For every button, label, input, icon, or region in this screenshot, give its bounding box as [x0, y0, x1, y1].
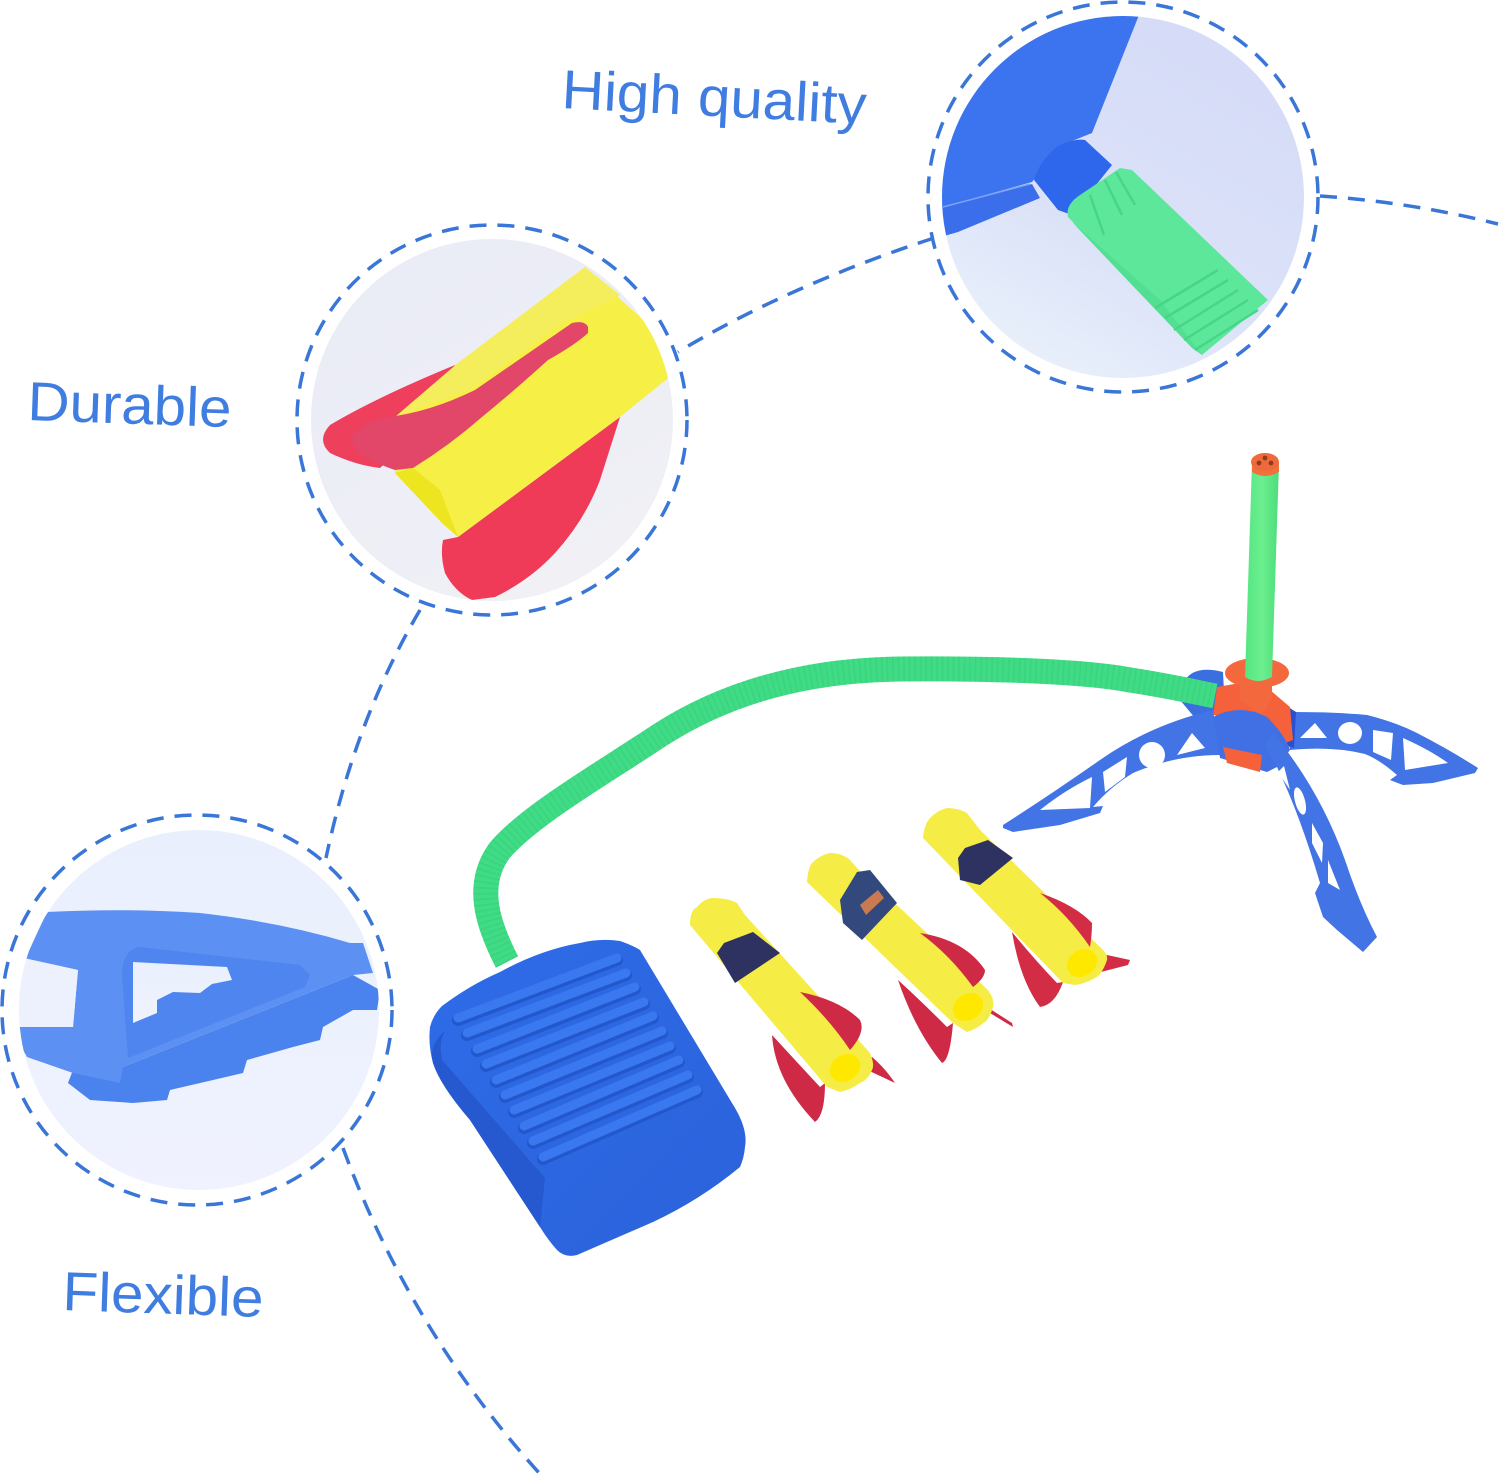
- launcher right leg: [1283, 708, 1478, 785]
- launch tube: [1245, 463, 1279, 681]
- label: Flexible: Flexible: [62, 1260, 265, 1329]
- label: Durable: Durable: [27, 370, 233, 439]
- tube cap: [1251, 453, 1279, 476]
- product: launch stand: [1003, 453, 1478, 952]
- label: High quality: High quality: [560, 58, 869, 136]
- launcher left leg: [1003, 710, 1220, 832]
- launcher center arch: [1213, 710, 1290, 772]
- detail image: launcher leg: [19, 830, 379, 1190]
- launcher hub flange: [1225, 658, 1289, 688]
- product: air hose: [486, 669, 1215, 962]
- product: foot pedal: [429, 940, 746, 1256]
- product: foam rocket 3: [923, 808, 1130, 1007]
- feature circle: durable: [297, 225, 690, 620]
- connecting dashed curve: [326, 196, 1498, 1474]
- feature circle: flexible: [0, 815, 400, 1220]
- launcher hub: [1284, 705, 1296, 748]
- launcher rear clips: [1180, 670, 1225, 718]
- detail image: foam rocket fins: [311, 239, 673, 601]
- product: foam rocket 1: [690, 898, 895, 1122]
- launcher front leg: [1265, 733, 1377, 952]
- feature circle: high quality: [928, 0, 1320, 392]
- launcher orange clip: [1223, 747, 1262, 772]
- pedal ribs: [458, 958, 697, 1159]
- detail image: launcher base and hose: [942, 16, 1304, 378]
- product: foam rocket 2: [807, 853, 1013, 1063]
